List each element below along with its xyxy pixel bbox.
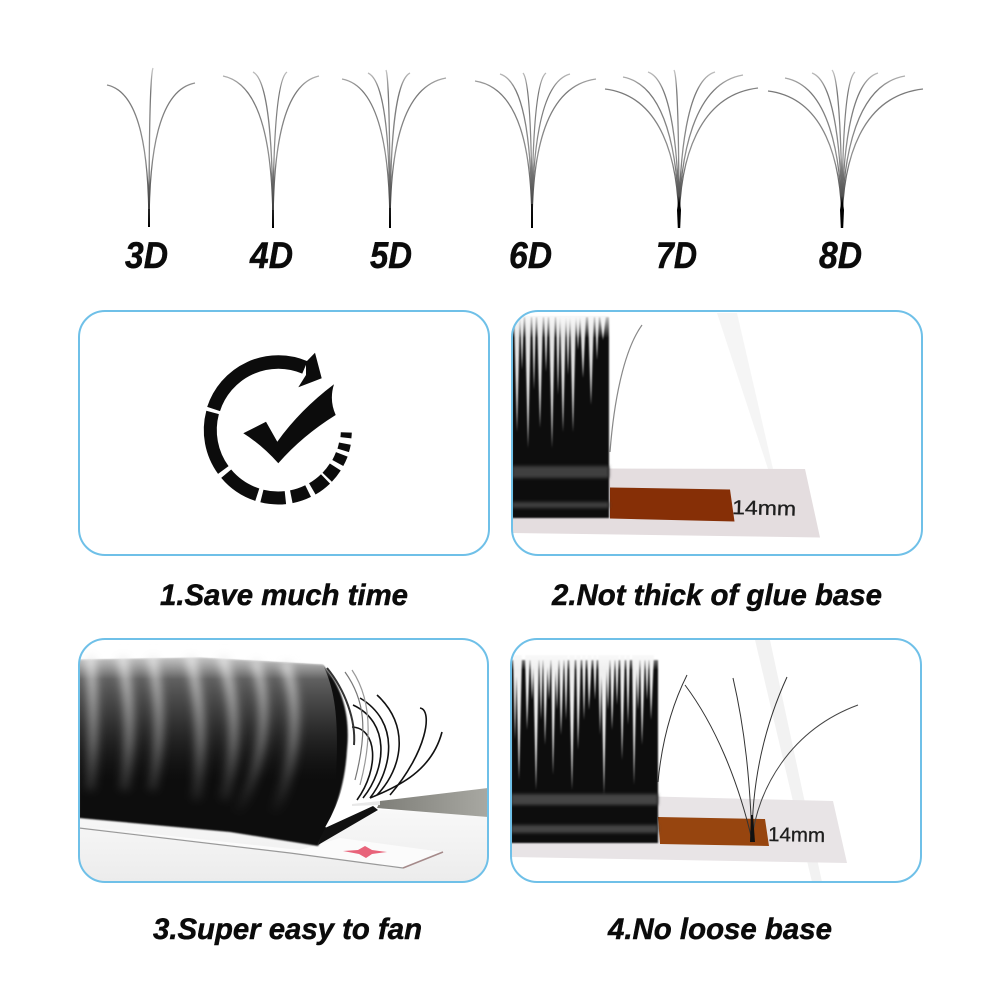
strip card	[512, 468, 820, 538]
strip card	[511, 796, 847, 863]
label: 7D: 7D	[656, 235, 697, 276]
fan: 6D lash	[475, 73, 596, 228]
label: 8D: 8D	[819, 235, 862, 276]
lash block	[512, 314, 612, 518]
label: 3D: 3D	[125, 235, 168, 276]
fanned lashes	[345, 670, 442, 800]
brown glue bar	[658, 817, 769, 846]
table surface	[80, 816, 487, 881]
size text: 14mm	[732, 497, 796, 521]
red star mark	[343, 846, 387, 858]
label: 4D: 4D	[249, 235, 293, 276]
caption: 4: 4.No loose base	[607, 913, 832, 946]
fan: 3D lash	[107, 68, 195, 227]
panel: no loose base photo	[511, 639, 921, 882]
single fan lash	[610, 325, 642, 452]
single fan lashes	[658, 675, 858, 840]
caption: 1: 1.Save much time	[160, 579, 408, 612]
label: 5D: 5D	[370, 235, 412, 276]
panel: glue base photo	[512, 311, 922, 555]
label: 6D: 6D	[509, 235, 552, 276]
tweezers	[377, 788, 488, 817]
fan base	[750, 815, 755, 842]
icon: circular arrow with check mark	[210, 353, 346, 498]
transparent band	[755, 640, 822, 882]
caption: 3: 3.Super easy to fan	[153, 913, 422, 946]
strip card	[193, 840, 440, 867]
lash block	[511, 650, 661, 843]
panel: save time	[79, 311, 489, 555]
lash roots	[318, 806, 378, 845]
fan: 5D lash	[342, 70, 446, 228]
transparent band	[717, 313, 773, 469]
size text: 14mm	[768, 824, 825, 847]
panel: fanning photo	[76, 639, 488, 882]
brown glue bar	[610, 488, 734, 522]
lash block blurred	[76, 645, 354, 846]
fan: 8D lash	[768, 70, 923, 228]
fan: 7D lash	[605, 70, 758, 228]
fan: 4D lash	[223, 72, 319, 228]
caption: 2: 2.Not thick of glue base	[551, 579, 882, 612]
